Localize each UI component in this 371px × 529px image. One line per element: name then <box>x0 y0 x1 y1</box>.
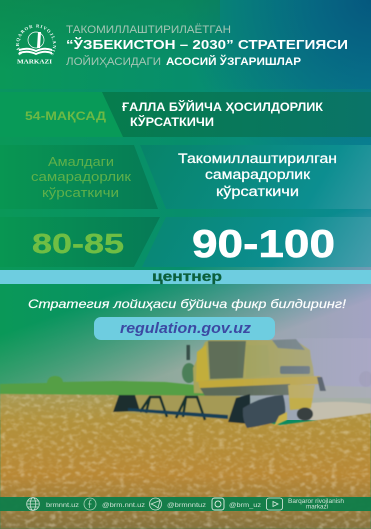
unit band: центнер <box>152 268 222 284</box>
logo: MARKAZI <box>17 60 53 66</box>
header title: ТАКОМИЛЛАШТИРИЛАЁТГАН <box>66 24 231 36</box>
icon: telegram <box>150 498 162 510</box>
logo <box>16 24 56 66</box>
row 1: goal title: КЎРСАТКИЧИ <box>130 116 214 129</box>
distant haze field on the right <box>300 385 371 420</box>
small tree behind harvester <box>182 363 196 383</box>
row 2: current indicator <box>0 145 158 209</box>
icon: globe <box>27 498 39 510</box>
row 1: goal title <box>102 92 371 137</box>
tree line <box>0 376 215 400</box>
icon: youtube <box>266 498 282 510</box>
row 2: current indicator: кўрсаткичи <box>42 185 119 200</box>
call to action: Стратегия лойиҳаси бўйича фикр билдиринг! <box>28 299 347 311</box>
icon: instagram <box>212 498 224 510</box>
header title <box>66 24 348 68</box>
row 2: improved indicator: кўрсаткичи <box>216 184 299 199</box>
row 2: improved indicator: Такомиллаштирилган <box>178 151 337 166</box>
footer social bar: @brm_uz <box>229 502 261 509</box>
footer social bar: markazi <box>306 504 328 510</box>
photo: wheat field with combine harvester <box>0 338 371 529</box>
row 2: improved indicator: самарадорлик <box>205 167 310 182</box>
row 3: improved value: 90-100 <box>192 223 335 266</box>
background gradient with sky <box>0 0 371 420</box>
icon: facebook <box>84 498 96 510</box>
harvester body <box>193 340 315 395</box>
url button <box>94 317 275 340</box>
row 1 divider band <box>0 89 371 92</box>
unit band <box>0 268 371 284</box>
header title: АСОСИЙ ЎЗГАРИШЛАР <box>166 55 301 68</box>
row 3: current value <box>0 217 160 267</box>
harvester wheel <box>297 408 313 420</box>
row 1: goal title: ҒАЛЛА БЎЙИЧА ҲОСИЛДОРЛИК <box>122 101 324 114</box>
row 3: current value: 80-85 <box>32 228 124 259</box>
footer social bar: Barqaror rivojlanish <box>288 499 344 505</box>
row 3: improved value <box>142 217 371 267</box>
footer social bar: brmnnt.uz <box>46 502 79 509</box>
harvester side cover <box>243 395 285 428</box>
harvester header reel <box>115 395 240 420</box>
header title: ЛОЙИҲАСИДАГИ <box>66 55 161 68</box>
row 2: improved indicator <box>140 145 371 209</box>
footer social bar: @brmnntuz <box>167 502 206 509</box>
row 2: current indicator: Амалдаги <box>48 154 114 169</box>
url button: regulation.gov.uz <box>120 320 252 337</box>
field <box>0 394 371 529</box>
row 1: goal number: 54-МАҚСАД <box>25 109 107 123</box>
footer social bar <box>0 497 371 511</box>
tree on the right horizon <box>359 371 371 387</box>
harvester haze <box>235 338 371 398</box>
row 1: goal number <box>0 92 123 137</box>
row 2: current indicator: самарадорлик <box>31 169 131 184</box>
header title: “ЎЗБЕКИСТОН – 2030” СТРАТЕГИЯСИ <box>66 37 348 52</box>
footer social bar: @brm.nnt.uz <box>102 502 145 509</box>
